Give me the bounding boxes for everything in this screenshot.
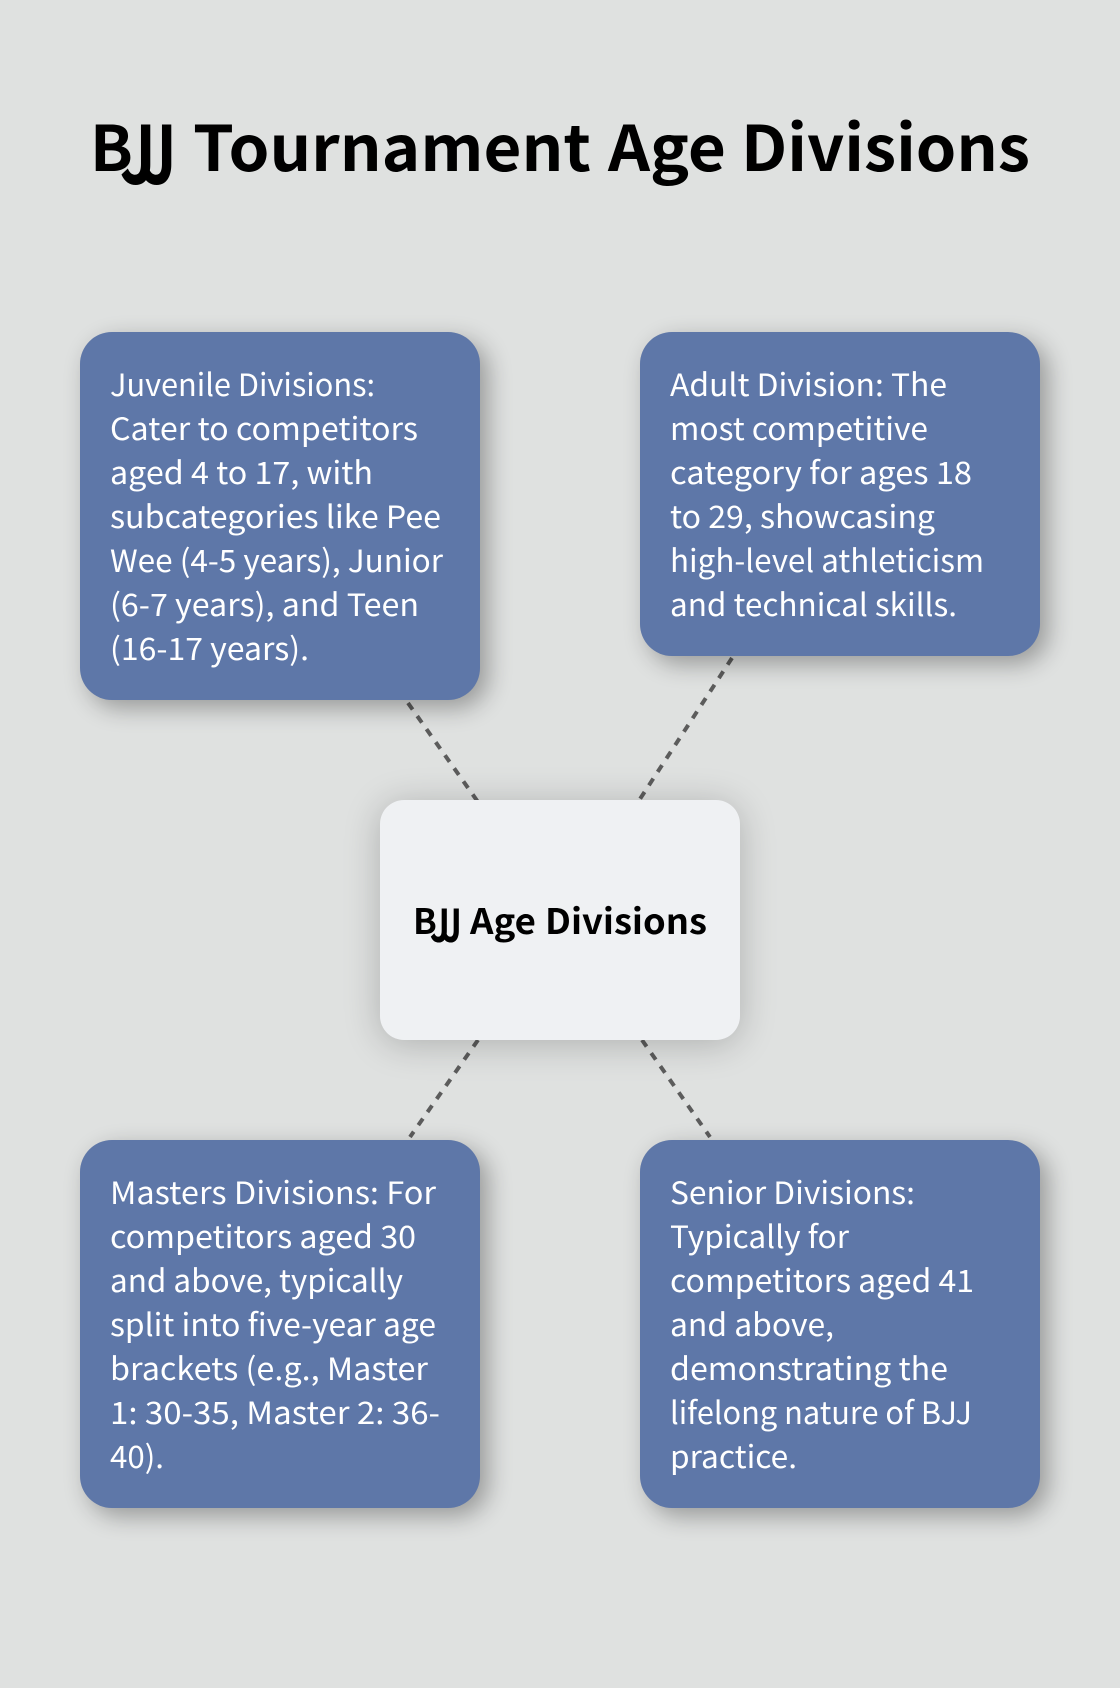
text: masters divisions: 1: 30-35, Master 2: 36- <box>110 1388 440 1433</box>
text: juvenile divisions: (6-7 years), and Teen <box>110 580 419 625</box>
text: senior divisions: and above, <box>670 1300 834 1345</box>
text: senior divisions: competitors aged 41 <box>670 1256 974 1301</box>
text: masters divisions: brackets (e.g., Master <box>110 1344 429 1389</box>
text: adult division: category for ages 18 <box>670 448 972 493</box>
text: adult division: Adult Division: The <box>670 360 947 405</box>
title <box>90 90 1030 207</box>
title: Divisions <box>741 99 1030 190</box>
text: masters divisions: and above, typically <box>110 1256 403 1301</box>
text: senior divisions: Typically for <box>670 1212 850 1257</box>
text: adult division: and technical skills. <box>670 580 957 625</box>
text: adult division: high-level athleticism <box>670 536 984 581</box>
text: juvenile divisions: Juvenile Divisions: <box>110 360 375 405</box>
text: masters divisions: split into five-year age <box>110 1300 436 1345</box>
text: masters divisions: 40). <box>110 1432 164 1477</box>
text: juvenile divisions: Wee (4-5 years), Junior <box>110 536 444 581</box>
panel: center hub <box>380 800 740 1040</box>
text: juvenile divisions: subcategories like Pee <box>110 492 441 537</box>
text: adult division <box>670 360 984 625</box>
center label <box>413 889 707 955</box>
text: senior divisions <box>670 1168 974 1477</box>
panel: masters divisions <box>80 1140 480 1508</box>
text: juvenile divisions <box>110 360 444 669</box>
title: J <box>141 90 177 207</box>
text: juvenile divisions: Cater to competitors <box>110 404 418 449</box>
title: B <box>90 99 133 190</box>
panel: senior divisions <box>640 1140 1040 1508</box>
panel: juvenile divisions <box>80 332 480 700</box>
text: juvenile divisions: (16-17 years). <box>110 624 309 669</box>
text: senior divisions: Senior Divisions: <box>670 1168 915 1213</box>
center label: J <box>442 889 462 955</box>
center label: Age <box>469 894 536 945</box>
title: J <box>120 90 156 207</box>
text: adult division: most competitive <box>670 404 928 449</box>
text: senior divisions: lifelong nature of BJJ <box>670 1388 972 1433</box>
panel: adult division <box>640 332 1040 656</box>
center label: J <box>430 889 450 955</box>
text: masters divisions: competitors aged 30 <box>110 1212 416 1257</box>
center label: Divisions <box>545 894 707 945</box>
title: Age <box>607 99 726 190</box>
title: Tournament <box>193 99 591 190</box>
text: juvenile divisions: aged 4 to 17, with <box>110 448 373 493</box>
text: senior divisions: demonstrating the <box>670 1344 948 1389</box>
text: senior divisions: practice. <box>670 1432 797 1477</box>
text: adult division: to 29, showcasing <box>670 492 936 537</box>
text: masters divisions <box>110 1168 440 1477</box>
center label: B <box>413 894 437 945</box>
text: masters divisions: Masters Divisions: For <box>110 1168 437 1213</box>
